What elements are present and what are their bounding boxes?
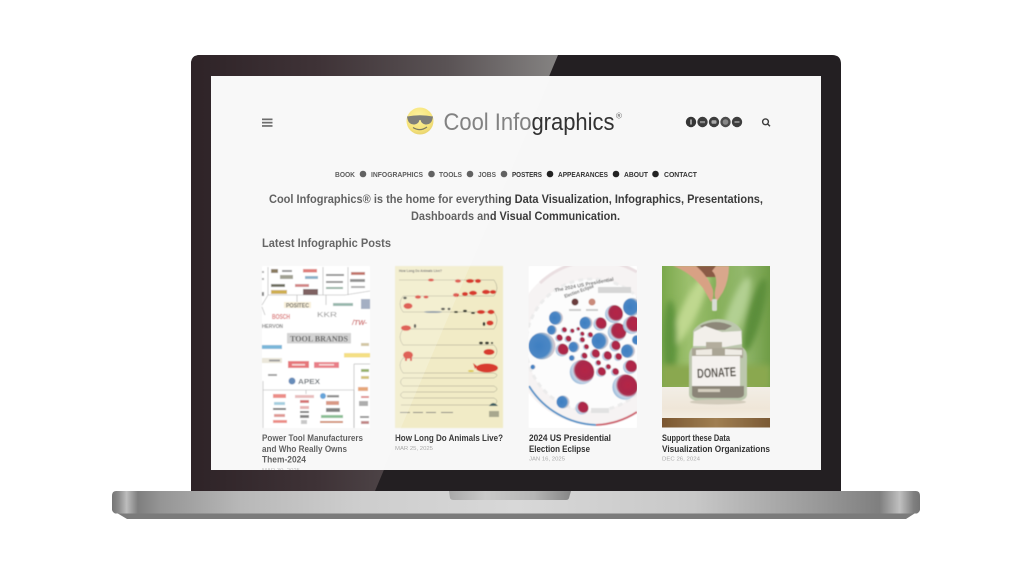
navigation menu: APPEARANCES <box>558 170 608 179</box>
date: election: JAN 16, 2025 <box>529 456 565 462</box>
navigation menu <box>335 170 697 178</box>
tagline: Cool Infographics® is the home for everything Data Visualization, Infographics, Presentations, <box>269 192 763 206</box>
thumbnail logos <box>262 302 368 386</box>
caption: election: Election Eclipse <box>529 444 590 454</box>
icon: sunglasses smiley <box>406 108 434 134</box>
post card: power tools <box>262 266 370 474</box>
caption: donate: Support these Data <box>662 433 731 443</box>
social icons <box>686 117 742 127</box>
thumbnail: animal lifespans: How Long Do Animals Live? <box>399 269 442 273</box>
navigation menu: POSTERS <box>512 170 542 179</box>
thumbnail logos: APEX <box>298 379 320 386</box>
screen glare <box>262 108 530 470</box>
date: donate: DEC 26, 2024 <box>662 456 700 462</box>
laptop base <box>112 491 920 519</box>
navigation menu: ABOUT <box>624 170 648 179</box>
tagline <box>269 194 762 220</box>
thumbnail title: Election Eclipse <box>564 284 595 300</box>
table <box>662 387 770 418</box>
post card: donate <box>662 266 772 462</box>
navigation menu: JOBS <box>478 170 496 179</box>
caption: power tools: and Who Really Owns <box>262 444 347 454</box>
tagline: Dashboards and Visual Communication. <box>411 209 620 223</box>
screen content <box>262 108 772 474</box>
caption: animals: How Long Do Animals Live? <box>395 433 503 443</box>
thumbnail logos: HERVON <box>262 324 283 330</box>
caption: election <box>529 433 611 454</box>
caption: election: 2024 US Presidential <box>529 433 611 443</box>
navigation menu: CONTACT <box>664 170 697 179</box>
registered mark: ® <box>616 112 622 120</box>
navigation menu: BOOK <box>335 170 356 179</box>
date: power tools: MAR 30, 2025 <box>262 468 300 474</box>
base top surface <box>112 491 920 514</box>
bezel reflection <box>191 55 558 491</box>
icon: search <box>763 119 770 126</box>
navigation menu: INFOGRAPHICS <box>371 170 423 179</box>
thumbnail logos: KKR <box>317 312 337 319</box>
hamburger menu icon <box>262 118 272 127</box>
screen <box>211 76 821 474</box>
bezel frame <box>191 55 841 491</box>
screen background <box>211 76 821 470</box>
thumbnail: tool brands <box>262 266 370 428</box>
caption: donate <box>662 433 770 454</box>
thumbnail logos: POSITEC <box>286 304 310 310</box>
hand and coin <box>673 266 729 311</box>
caption: power tools: Power Tool Manufacturers <box>262 433 363 443</box>
section heading: Latest Infographic Posts <box>262 238 391 250</box>
base underside <box>112 505 920 519</box>
thumbnail logos: /TW- <box>351 320 368 327</box>
thumbnail logos: BOSCH <box>272 314 290 321</box>
thumbnail logos: TOOL BRANDS <box>290 334 348 344</box>
laptop bezel <box>191 55 841 491</box>
trackpad notch <box>449 491 571 500</box>
logo <box>406 108 622 136</box>
jar label: DONATE <box>697 364 737 381</box>
thumbnail title: The 2024 US Presidential <box>554 277 615 294</box>
coin jar <box>689 319 747 404</box>
date: animals: MAR 25, 2025 <box>395 446 433 452</box>
post card: animals <box>395 266 503 452</box>
thumbnail: animal lifespans <box>395 266 503 428</box>
thumbnail: election eclipse <box>528 266 637 426</box>
navigation menu: TOOLS <box>439 170 462 179</box>
caption: power tools <box>262 434 363 462</box>
thumbnail: donation jar photo <box>662 266 772 428</box>
caption: power tools: Them-2024 <box>262 454 306 464</box>
logo wordmark: Cool Infographics <box>444 109 614 136</box>
post card: election <box>528 266 637 462</box>
caption: donate: Visualization Organizations <box>662 444 770 454</box>
